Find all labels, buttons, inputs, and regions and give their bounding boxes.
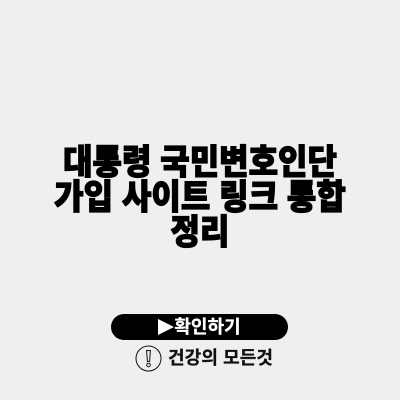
footer: 건강의 모든것 [136, 346, 273, 372]
title [54, 143, 346, 251]
button: 확인하기 [111, 314, 288, 340]
title line 3: 정리 [171, 213, 229, 251]
footer text: 건강의 모든것 [168, 348, 273, 368]
title line 1: 대통령 국민변호인단 [63, 143, 337, 181]
button: 확인하기: 확인하기 [174, 317, 241, 337]
icon: exclamation circle [136, 346, 162, 372]
title line 2: 가입 사이트 링크 통합 [54, 178, 346, 216]
